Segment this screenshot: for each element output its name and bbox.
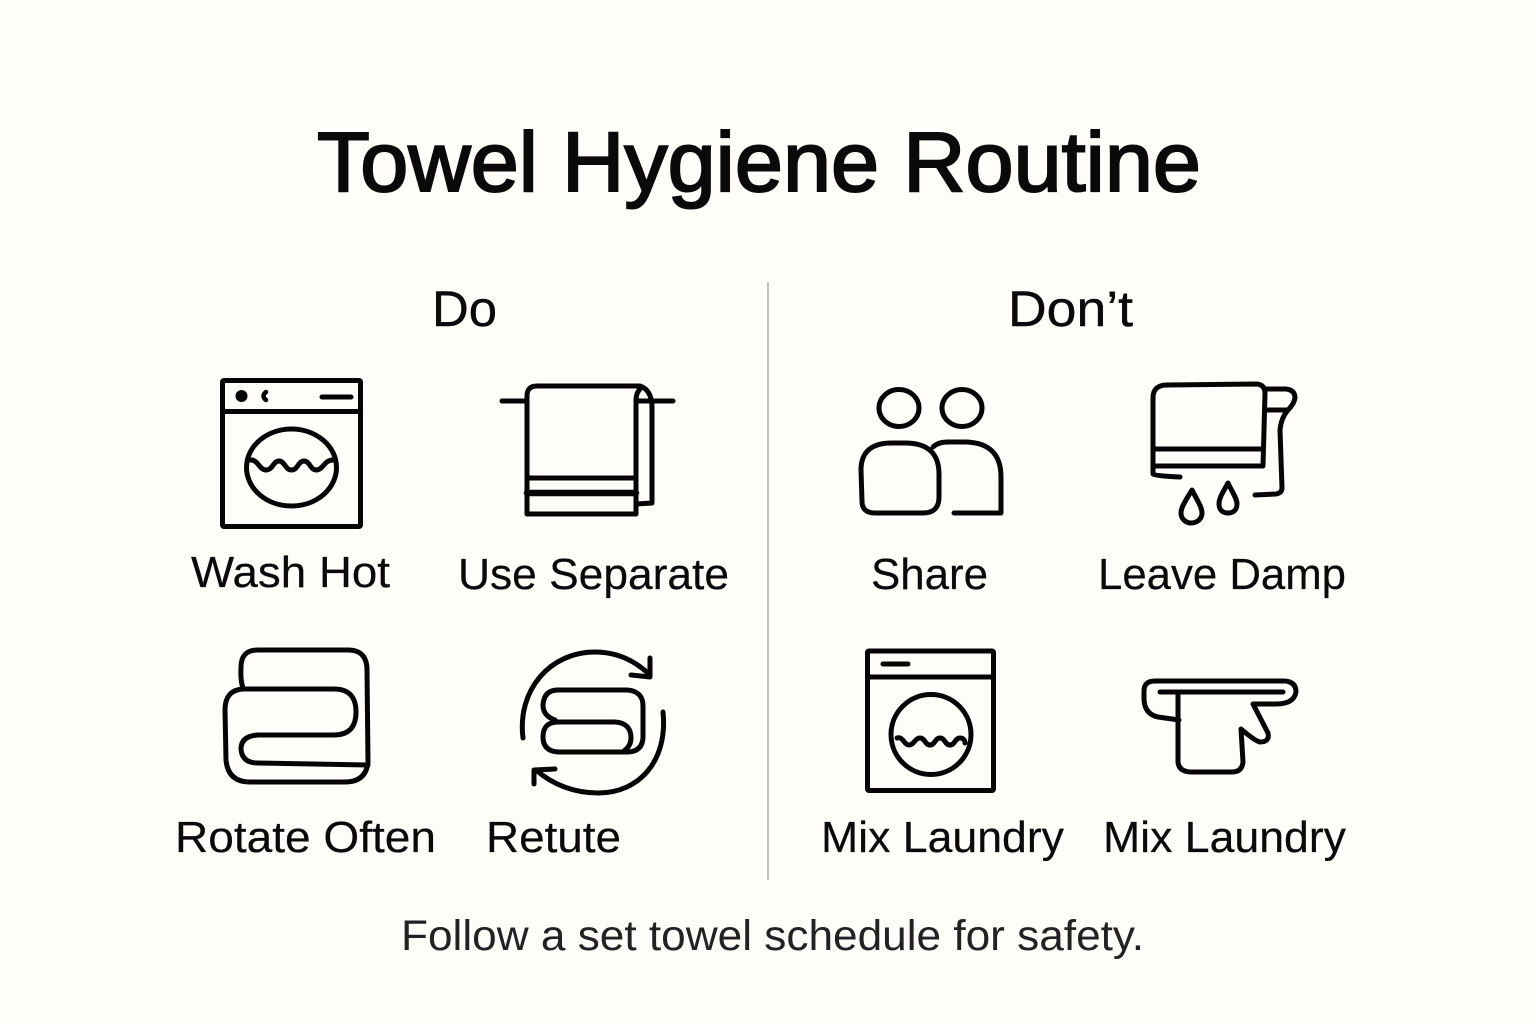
item: share xyxy=(861,390,1001,599)
icon: washing machine xyxy=(222,380,360,526)
label: use separate: Use Separate xyxy=(458,550,729,599)
label: mix laundry: Mix Laundry xyxy=(1103,813,1346,862)
icon: towel on shelf xyxy=(1144,681,1296,772)
footer note: Follow a set towel schedule for safety. xyxy=(401,912,1144,960)
icon: damp towel with drips xyxy=(1153,384,1295,523)
icon: two people xyxy=(861,390,1001,513)
item: rotate often xyxy=(175,650,436,862)
title: Towel Hygiene Routine xyxy=(317,115,1201,209)
icon: washing machine xyxy=(868,651,994,790)
item: mix laundry (towel) xyxy=(1103,681,1346,862)
item: use separate xyxy=(458,386,729,599)
label: share: Share xyxy=(871,550,988,599)
item: retute xyxy=(486,652,664,862)
label: mix laundry: Mix Laundry xyxy=(821,813,1064,862)
icon: towel with rotate arrows xyxy=(522,652,664,793)
label: wash hot: Wash Hot xyxy=(191,548,390,597)
label: rotate often: Rotate Often xyxy=(175,813,436,862)
item: leave damp xyxy=(1098,384,1346,599)
heading: do: Do xyxy=(432,281,497,337)
item: wash hot xyxy=(191,380,390,597)
panel: do xyxy=(175,281,729,862)
heading: don't: Don’t xyxy=(1008,281,1133,337)
icon: towel on rail xyxy=(502,386,673,514)
label: leave damp: Leave Damp xyxy=(1098,550,1346,599)
item: mix laundry xyxy=(821,651,1064,862)
icon: folded towel xyxy=(225,650,368,782)
label: retute: Retute xyxy=(486,813,621,862)
panel: don't xyxy=(821,281,1346,862)
